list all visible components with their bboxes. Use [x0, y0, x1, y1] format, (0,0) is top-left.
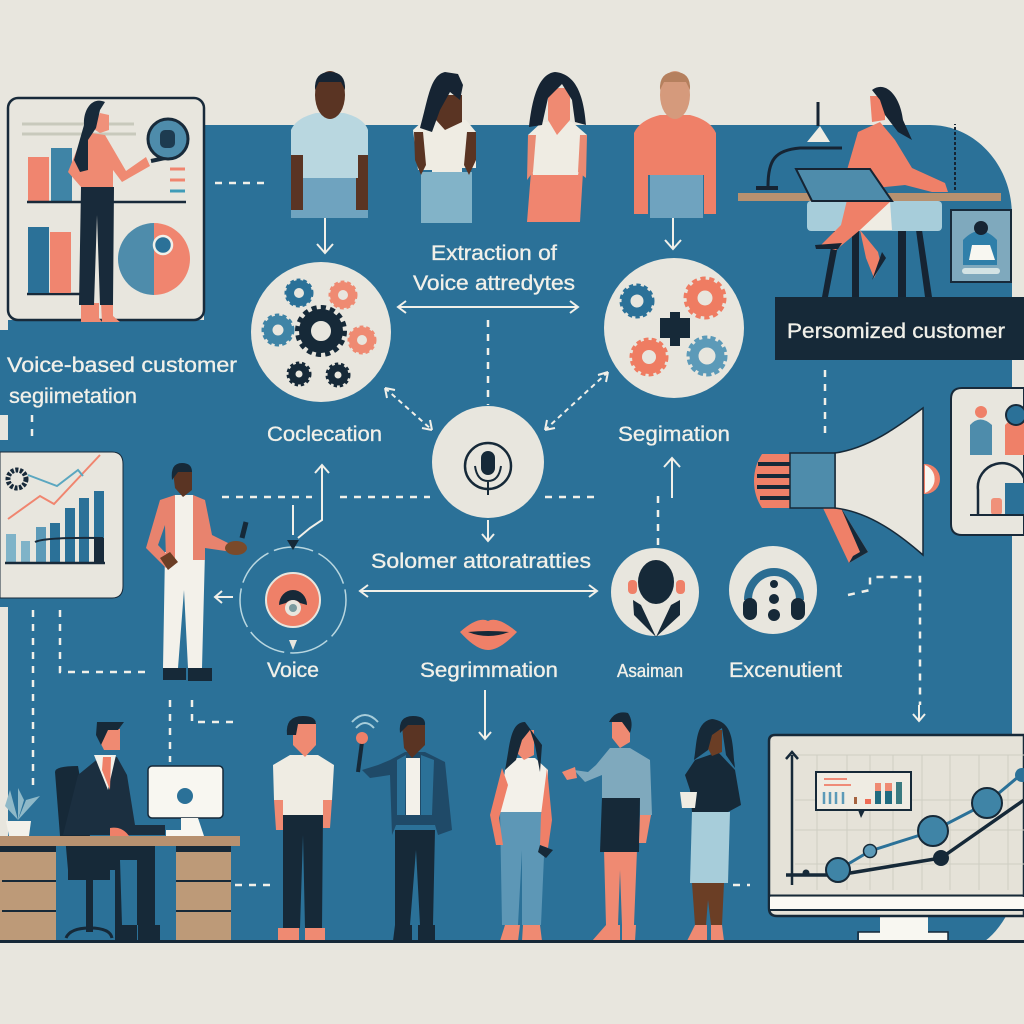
- icon: microphone circle: [432, 406, 544, 518]
- icon: lips: [460, 620, 517, 650]
- panel: growth chart: [0, 452, 123, 598]
- figure: woman with notes: [680, 719, 741, 941]
- icon: gears circle left: [251, 262, 391, 402]
- labels: Coclecation: [267, 423, 382, 446]
- icon: voice target: [240, 540, 346, 653]
- icon: headphones circle: [729, 546, 817, 634]
- heading: voice-based customer segmentation: Voice-based customer: [7, 354, 237, 377]
- heading: voice-based customer segmentation: [7, 354, 237, 408]
- figure: presenter man: [146, 463, 247, 681]
- figure: woman at laptop desk: [738, 87, 1001, 297]
- figure: top person 3: [527, 72, 587, 222]
- pie chart: [118, 223, 190, 295]
- heading: voice-based customer segmentation: segiimetation: [9, 385, 137, 408]
- labels: Solomer attoratratties: [371, 550, 591, 573]
- panel: people cards: [951, 388, 1024, 535]
- blue background panel: [0, 125, 1012, 941]
- icon: desk lamp: [756, 102, 955, 190]
- labels: Segrimmation: [420, 659, 558, 682]
- callout: mini bar chart: [816, 772, 911, 818]
- panel: analyst with charts: [8, 98, 204, 322]
- figure: top person 4: [634, 71, 716, 218]
- figure: bottom person in cream tee: [273, 716, 334, 941]
- icon: portrait frame: [951, 210, 1011, 282]
- labels: [267, 242, 842, 682]
- banner: personalized customer: Persomized customer: [787, 320, 1005, 343]
- figure: man with microphone: [352, 715, 452, 941]
- figure: top person 2: [413, 72, 476, 223]
- floor line: [0, 940, 1024, 943]
- labels: Voice: [267, 659, 319, 682]
- icon: plant: [5, 788, 40, 836]
- figure: woman analyst: [68, 101, 150, 322]
- labels: Excenutient: [729, 659, 842, 682]
- icon: magnifier: [148, 119, 188, 161]
- figure: woman in black skirt: [562, 712, 652, 941]
- figure: woman in jeans: [490, 722, 553, 941]
- labels: Extraction of: [431, 242, 557, 265]
- labels: Voice attredytes: [413, 272, 575, 295]
- icon: person bust circle: [611, 548, 699, 637]
- labels: Segimation: [618, 423, 730, 446]
- line series: [786, 768, 1024, 882]
- figure: businessman at desk: [0, 722, 240, 941]
- icon: gears circle right: [604, 258, 744, 398]
- figure: top person 1: [291, 71, 368, 218]
- icon: computer monitor: [148, 766, 223, 836]
- icon: megaphone: [754, 408, 940, 563]
- monitor with line chart: [769, 735, 1024, 941]
- banner: personalized customer: [775, 297, 1024, 360]
- labels: Asaiman: [617, 661, 683, 681]
